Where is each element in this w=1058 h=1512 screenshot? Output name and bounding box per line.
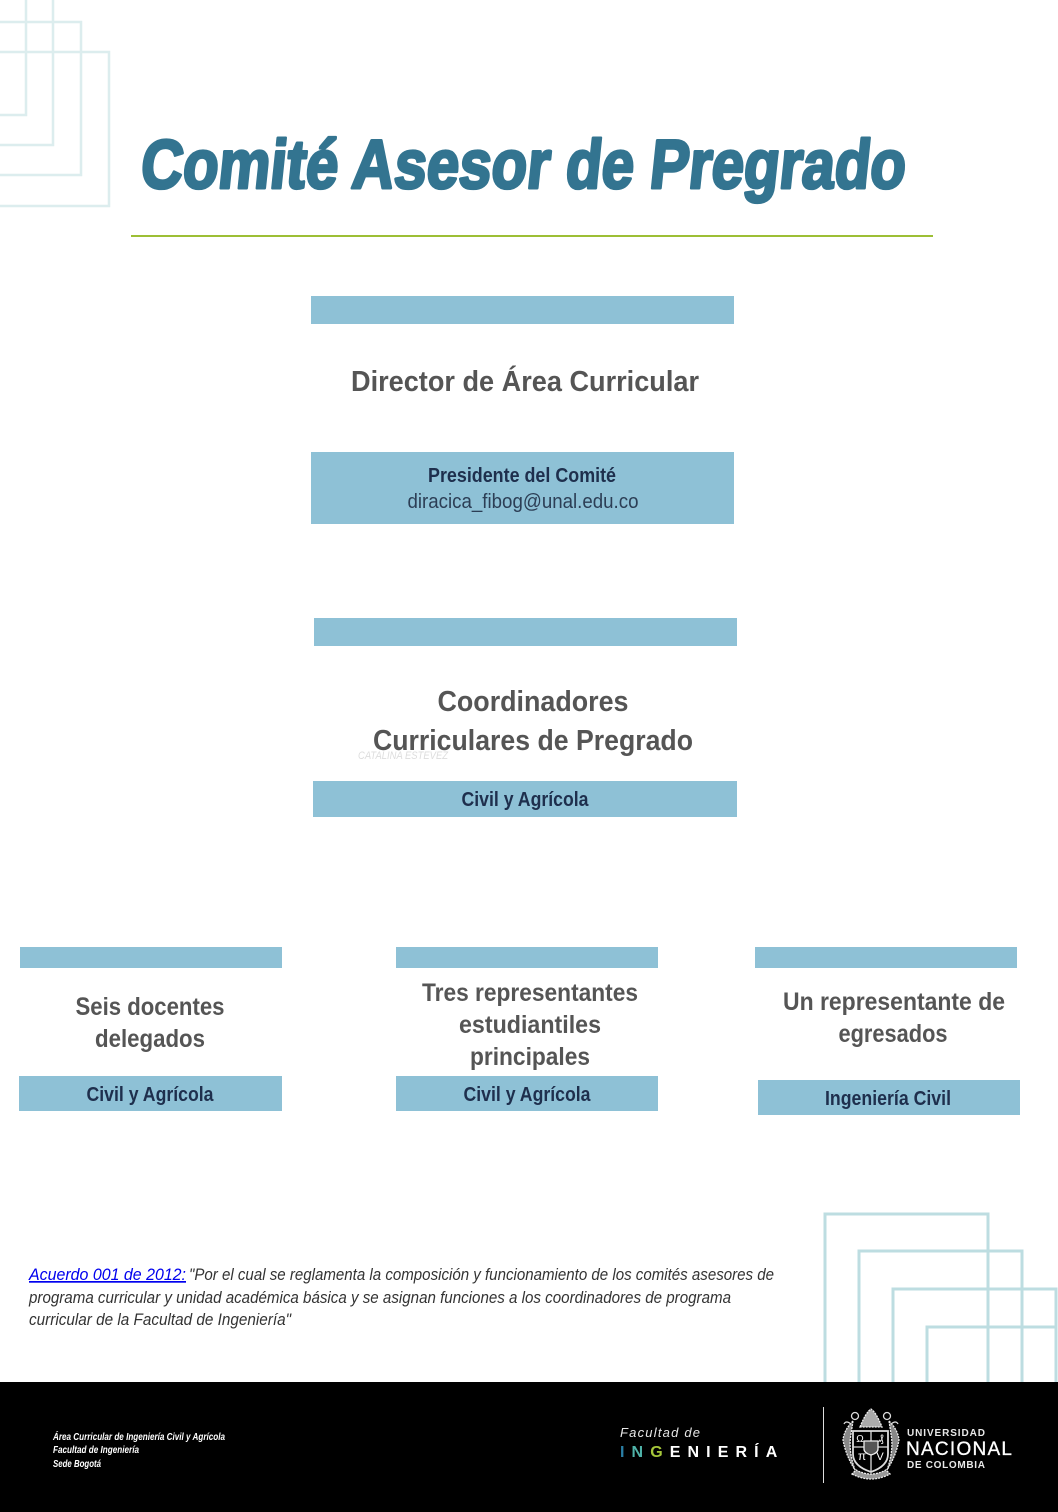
- docentes label: Civil y Agrícola: [86, 1084, 214, 1106]
- logo line nacional: NACIONAL: [906, 1439, 1012, 1460]
- docentes label box: [19, 1076, 282, 1111]
- docentes top bar: [20, 947, 282, 968]
- coordinadores label box: [313, 781, 737, 817]
- estudiantes heading: Tres representantes: [422, 979, 638, 1007]
- legal note: [28, 1265, 774, 1329]
- icon: university crest: π: [858, 1449, 866, 1463]
- crest symbols: Ω: [856, 1434, 864, 1445]
- estudiantes heading line 2: estudiantiles: [459, 1011, 601, 1039]
- address line 1: Área Curricular de Ingeniería Civil y Agrícola: [52, 1430, 225, 1443]
- logo line 2: INGENIERÍA: [620, 1442, 784, 1461]
- director top bar: [311, 296, 734, 324]
- faint name: CATALINA ESTEVEZ: [358, 750, 449, 762]
- icon: university crest: [843, 1409, 899, 1479]
- egresados label box: [758, 1080, 1020, 1115]
- coordinadores heading: Coordinadores: [438, 686, 628, 718]
- estudiantes heading line 3: principales: [470, 1043, 590, 1071]
- egresados label: Ingeniería Civil: [825, 1088, 951, 1110]
- docentes heading line 2: delegados: [95, 1025, 205, 1053]
- estudiantes label: Civil y Agrícola: [464, 1084, 591, 1106]
- egresados heading: Un representante de: [783, 988, 1005, 1016]
- egresados top bar: [755, 947, 1017, 968]
- panel: docentes: [19, 947, 282, 1111]
- director details box: [311, 452, 734, 524]
- title: Comité Asesor de Pregrado: [137, 125, 911, 203]
- legal line 2: programa curricular y unidad académica básica y se asignan funciones a los coordinadores de programa: [28, 1288, 731, 1307]
- address line 3: Sede Bogotá: [53, 1459, 101, 1470]
- estudiantes label box: [396, 1076, 658, 1111]
- panel: coordinadores: [313, 618, 737, 817]
- logo divider: [823, 1407, 824, 1483]
- panel: director: [311, 296, 734, 524]
- director email: diracica_fibog@unal.edu.co: [408, 491, 638, 513]
- egresados heading line 2: egresados: [838, 1020, 948, 1048]
- coordinadores top bar: [314, 618, 737, 646]
- director role: Presidente del Comité: [428, 465, 616, 487]
- logo line 1: Facultad de: [620, 1425, 700, 1440]
- director heading: Director de Área Curricular: [351, 364, 699, 398]
- address line 2: Facultad de Ingeniería: [53, 1445, 139, 1456]
- decorative squares: top left: [0, 0, 109, 206]
- panel: egresados: [755, 947, 1020, 1115]
- legal line 1: "Por el cual se reglamenta la composición y funcionamiento de los comités asesores de: [189, 1265, 774, 1284]
- legal link: Acuerdo 001 de 2012:: [28, 1265, 186, 1284]
- logo: Facultad de Ingeniería: [620, 1425, 784, 1461]
- panel: estudiantes: [396, 947, 658, 1111]
- logo: Universidad Nacional: [906, 1428, 1012, 1471]
- logo line universidad: UNIVERSIDAD: [907, 1428, 985, 1439]
- icon: university crest: V: [876, 1451, 884, 1463]
- coordinadores heading line 2: Curriculares de Pregrado: [373, 725, 693, 757]
- title underline: [131, 235, 933, 237]
- footer address: [52, 1430, 225, 1470]
- coordinadores label: Civil y Agrícola: [462, 789, 589, 811]
- docentes heading: Seis docentes: [76, 993, 224, 1021]
- icon: university crest: ₰: [878, 1434, 884, 1445]
- logo line colombia: DE COLOMBIA: [907, 1460, 985, 1471]
- legal line 3: curricular de la Facultad de Ingeniería": [29, 1310, 292, 1329]
- footer band: [0, 1382, 1058, 1512]
- decorative squares: bottom right: [825, 1214, 1056, 1382]
- estudiantes top bar: [396, 947, 658, 968]
